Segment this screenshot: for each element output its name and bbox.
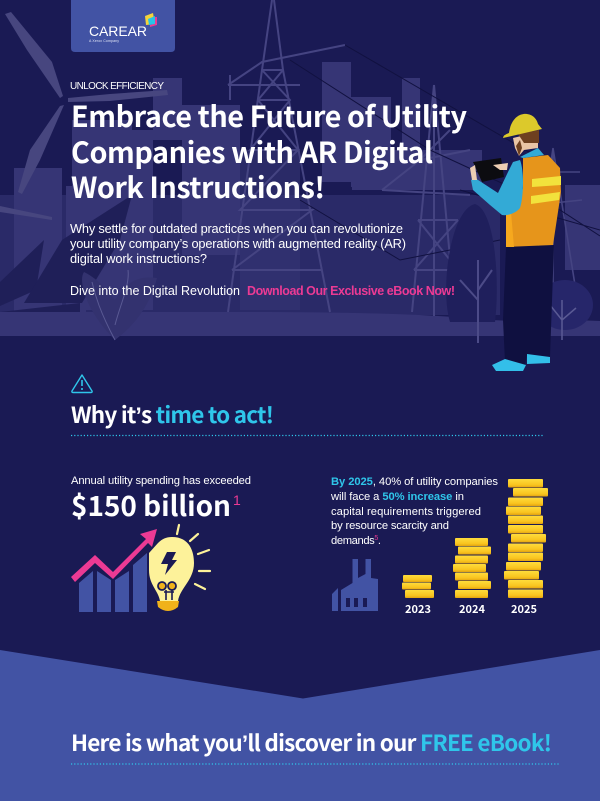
panel: logo badge bbox=[71, 0, 175, 52]
trousers bbox=[503, 245, 554, 365]
year labels: 2024 bbox=[459, 601, 486, 617]
stat: capital requirements text: . bbox=[378, 535, 381, 547]
bars bbox=[79, 553, 147, 612]
chart: coin stacks by year bbox=[402, 479, 548, 598]
sleeve and arm bbox=[471, 160, 523, 215]
logo tagline: A Xerox Company bbox=[89, 39, 119, 43]
coins 2024 bbox=[453, 538, 491, 598]
call to action line: Download Our Exclusive eBook Now! bbox=[247, 284, 455, 298]
year labels bbox=[405, 601, 537, 617]
panel: bottom chevron band bbox=[0, 650, 600, 801]
stat: annual utility spending: Annual utility spending has exceeded bbox=[71, 475, 251, 487]
illustration: construction worker with tablet bbox=[470, 114, 561, 371]
stat: capital requirements text: By 2025, 40% of utility companies bbox=[331, 476, 498, 488]
eyebrow text: UNLOCK EFFICIENCY bbox=[70, 81, 164, 92]
head, neck, hair and beard bbox=[513, 132, 538, 156]
intro paragraph: digital work instructions? bbox=[70, 251, 207, 266]
stat: capital requirements text bbox=[330, 476, 498, 547]
stat: annual utility spending: $150 billion bbox=[71, 485, 231, 525]
divider bottom bbox=[71, 763, 559, 765]
logo cube icon bbox=[145, 13, 157, 27]
stat: capital requirements text: capital requirements triggered bbox=[331, 506, 481, 518]
year labels: 2023 bbox=[405, 601, 431, 617]
title: Embrace the Future of Utility bbox=[71, 95, 467, 136]
tablet bbox=[473, 158, 504, 182]
year labels: 2025 bbox=[511, 601, 537, 617]
stat: capital requirements text: by resource scarcity and bbox=[331, 520, 449, 532]
trees and plants bbox=[82, 204, 593, 343]
title: Companies with AR Digital bbox=[71, 131, 433, 172]
factory windows bbox=[346, 598, 367, 607]
stat: annual utility spending: 1 bbox=[233, 492, 241, 508]
rays bbox=[177, 525, 210, 589]
stat: capital requirements text: demands bbox=[331, 535, 375, 547]
call to action line bbox=[70, 284, 455, 298]
shoes bbox=[492, 354, 550, 371]
hands bbox=[470, 163, 508, 180]
intro paragraph bbox=[70, 221, 406, 266]
transmission towers bbox=[228, 0, 600, 316]
background: utility landscape silhouette bbox=[0, 0, 600, 343]
hard hat bbox=[503, 114, 542, 138]
vest stripes bbox=[531, 176, 561, 204]
bolt bbox=[161, 552, 177, 575]
section heading: free ebook: Here is what you’ll discover in our FREE eBook! bbox=[71, 726, 552, 758]
icon: factory bbox=[332, 559, 378, 611]
coins 2023 bbox=[402, 575, 434, 598]
filament bbox=[164, 590, 174, 600]
solar panels bbox=[0, 195, 132, 312]
bulb bbox=[149, 537, 194, 601]
wind turbines bbox=[0, 12, 168, 220]
vest bbox=[506, 155, 561, 247]
section heading: why it's time to act: Why it’s time to act! bbox=[71, 398, 274, 430]
stat: capital requirements text: 5 bbox=[374, 535, 378, 542]
divider top bbox=[71, 434, 543, 436]
intro paragraph: your utility company’s operations with augmented reality (AR) bbox=[70, 236, 406, 251]
rising arrow bbox=[71, 529, 157, 582]
icon: warning triangle bbox=[72, 375, 92, 392]
intro paragraph: Why settle for outdated practices when you can revolutionize bbox=[70, 221, 403, 236]
icon: growth chart and light bulb bbox=[71, 525, 210, 612]
title: Work Instructions! bbox=[71, 166, 325, 207]
logo wordmark: CAREAR bbox=[89, 23, 147, 39]
coins 2025 bbox=[504, 479, 548, 598]
collar bbox=[520, 148, 544, 158]
call to action line: Dive into the Digital Revolution bbox=[70, 284, 240, 298]
title bbox=[71, 95, 467, 207]
stat: capital requirements text: will face a 50% increase in bbox=[330, 491, 464, 503]
